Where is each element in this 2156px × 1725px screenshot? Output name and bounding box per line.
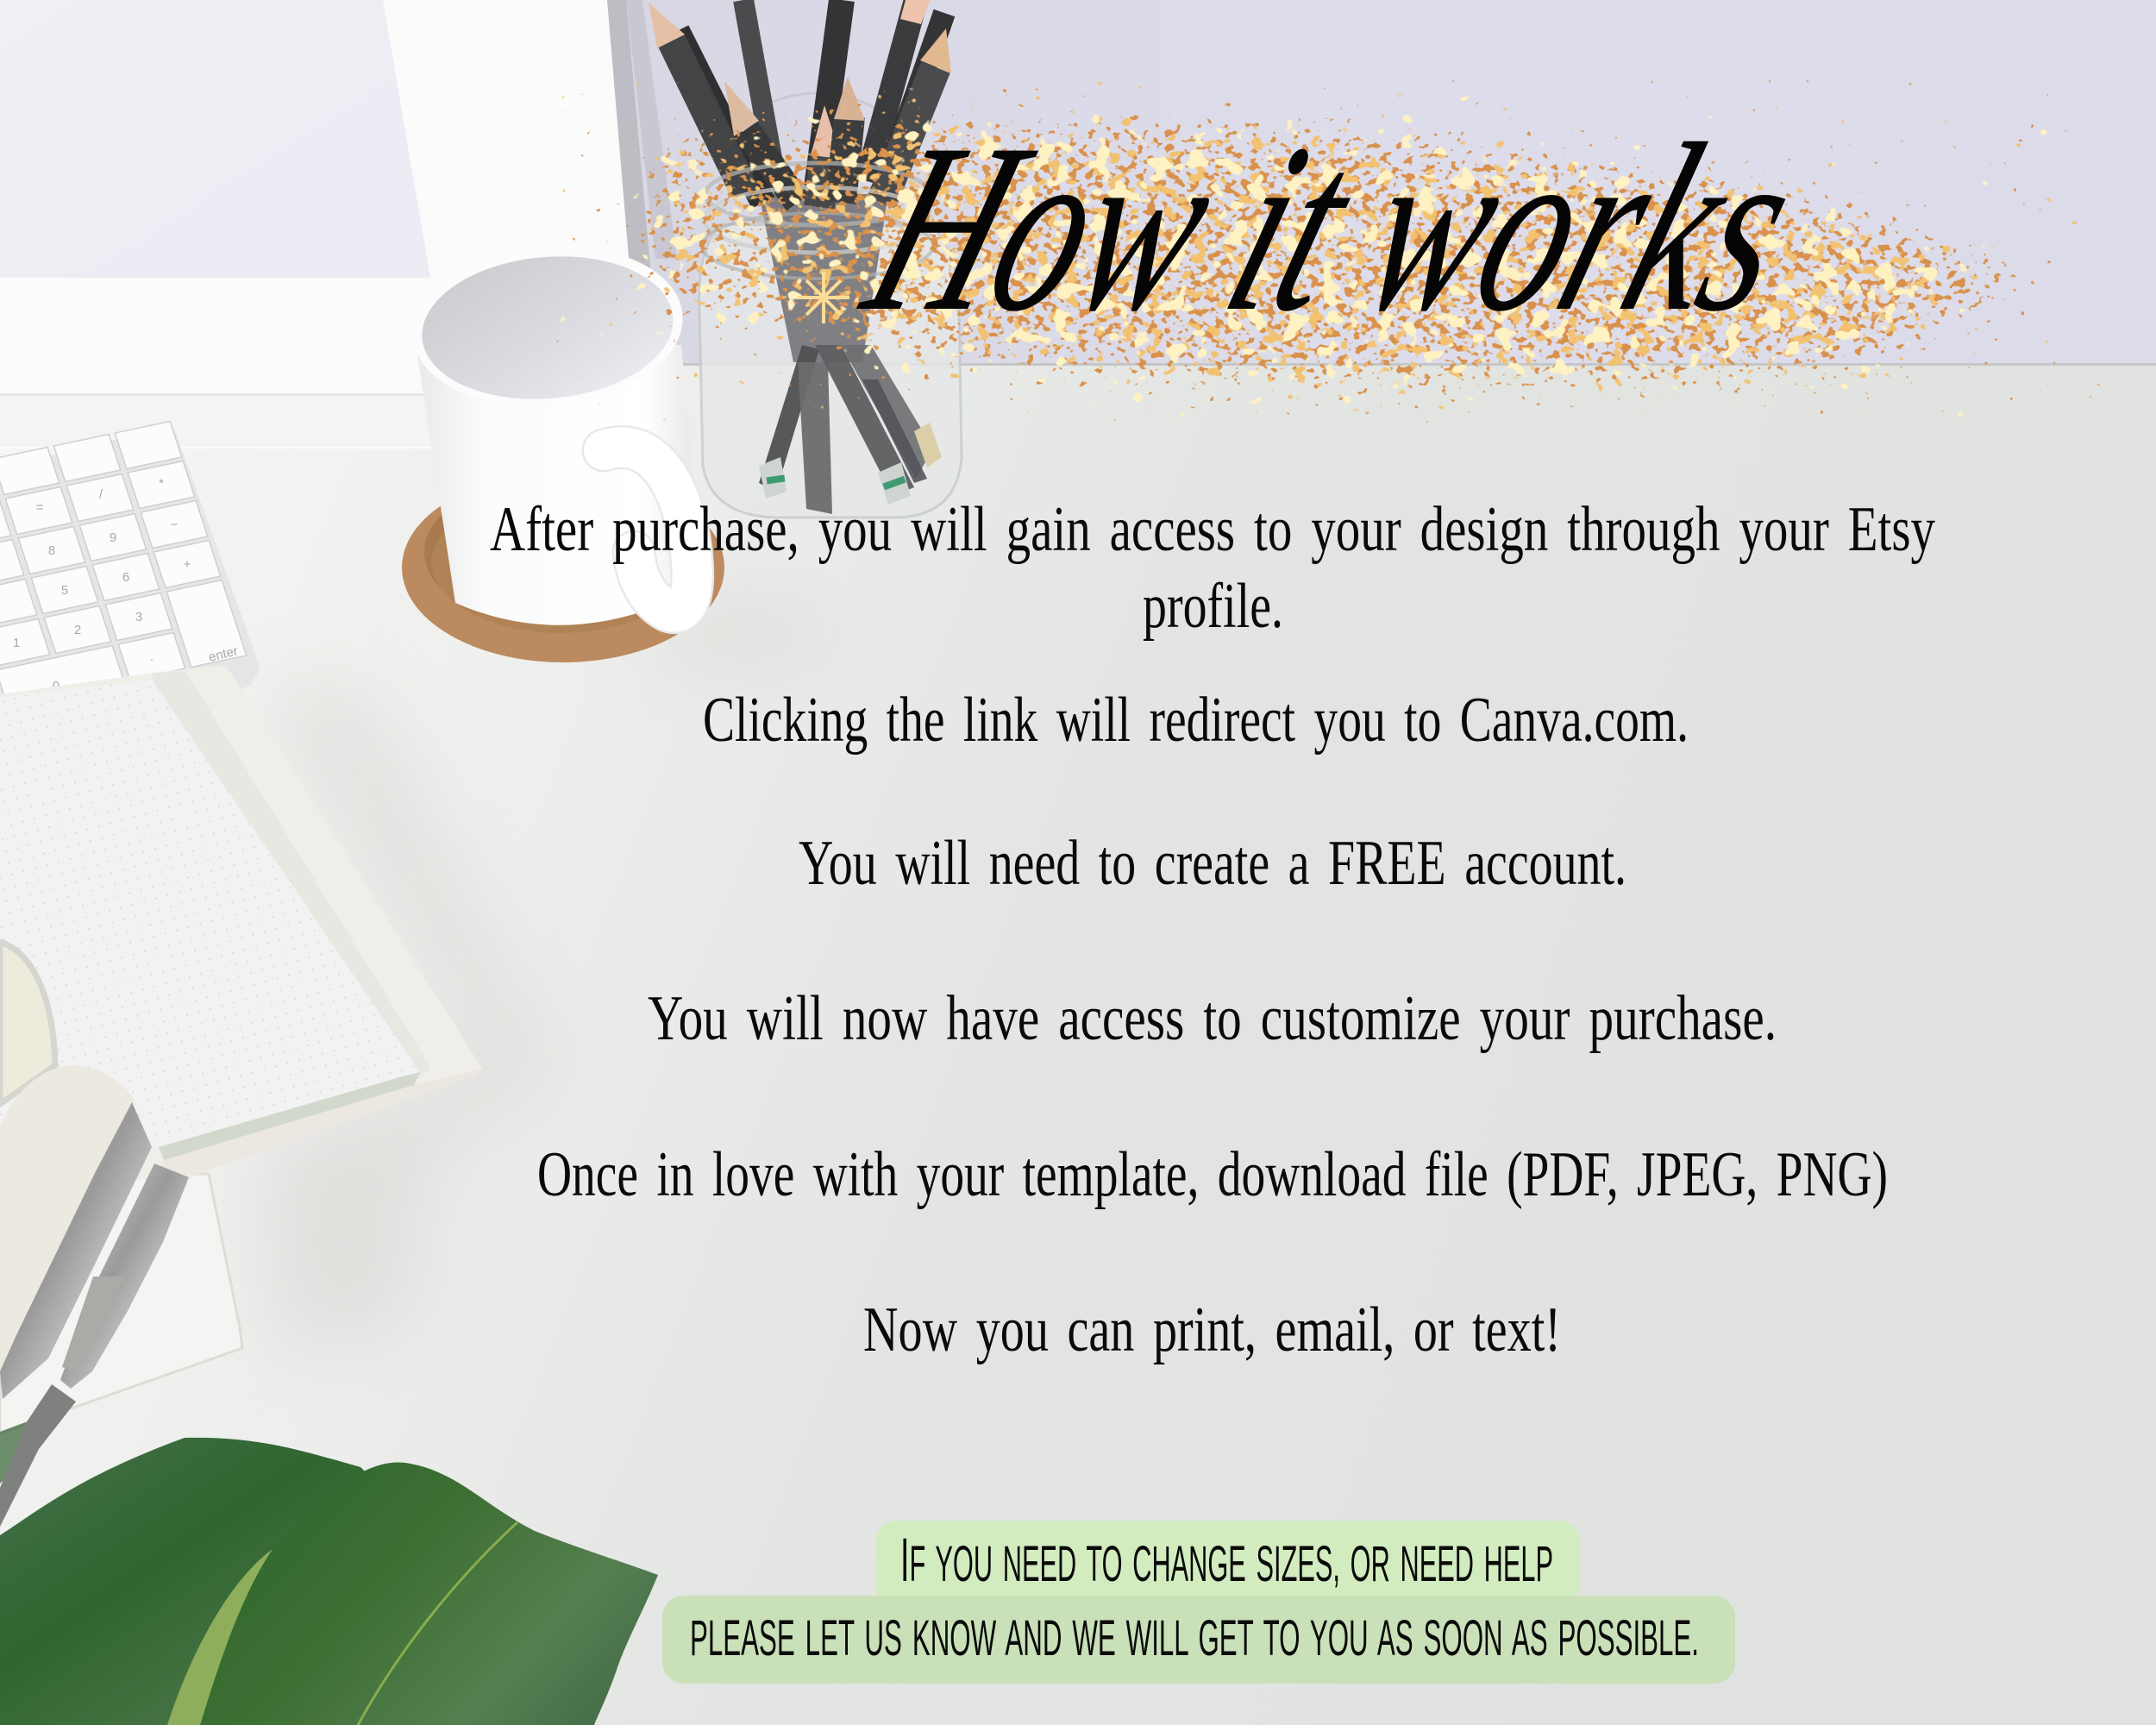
step 1 line 2: profile. — [1143, 571, 1283, 642]
pencil bodies through jar neck — [759, 194, 888, 362]
step 2: Clicking the link will redirect you to Canva.com. — [703, 685, 1689, 756]
step 6: Now you can print, email, or text! — [863, 1295, 1561, 1365]
notebook — [0, 666, 482, 1208]
keyboard: enter — [207, 643, 240, 665]
step 4: You will now have access to customize your purchase. — [648, 983, 1777, 1054]
keyboard: 9 — [110, 530, 116, 545]
keyboard: 3 — [135, 610, 142, 624]
keyboard: 2 — [74, 623, 81, 637]
help callout first line — [875, 1521, 1580, 1607]
desk soft shadows — [259, 604, 828, 1354]
step 3: You will need to create a FREE account. — [799, 828, 1626, 899]
keyboard: . — [150, 649, 154, 664]
help callout second line — [662, 1596, 1735, 1684]
jar and pencils — [649, 0, 962, 518]
headphones — [0, 942, 189, 1527]
leaves — [0, 1406, 658, 1725]
keyboard: − — [171, 518, 179, 532]
instructions — [490, 494, 1935, 1365]
keyboard: 1 — [13, 636, 20, 650]
white picture frame — [0, 0, 677, 448]
keyboard: * — [159, 476, 164, 491]
keyboard: 5 — [61, 583, 68, 598]
desk background — [0, 345, 2156, 1725]
keyboard: + — [184, 557, 191, 572]
keyboard — [0, 422, 260, 763]
keyboard: / — [99, 487, 103, 502]
notebook lower book — [0, 1173, 242, 1433]
keyboard: 8 — [48, 543, 55, 558]
mug — [406, 235, 700, 625]
coaster — [402, 473, 724, 662]
keyboard: = — [36, 500, 44, 515]
gold glitter brush stroke — [634, 125, 2022, 388]
keyboard: 6 — [122, 570, 129, 585]
help callout first line: IF YOU NEED TO CHANGE SIZES, OR NEED HELP — [900, 1527, 1553, 1595]
keyboard: 0 — [53, 679, 60, 693]
lavender wall — [604, 0, 2156, 366]
